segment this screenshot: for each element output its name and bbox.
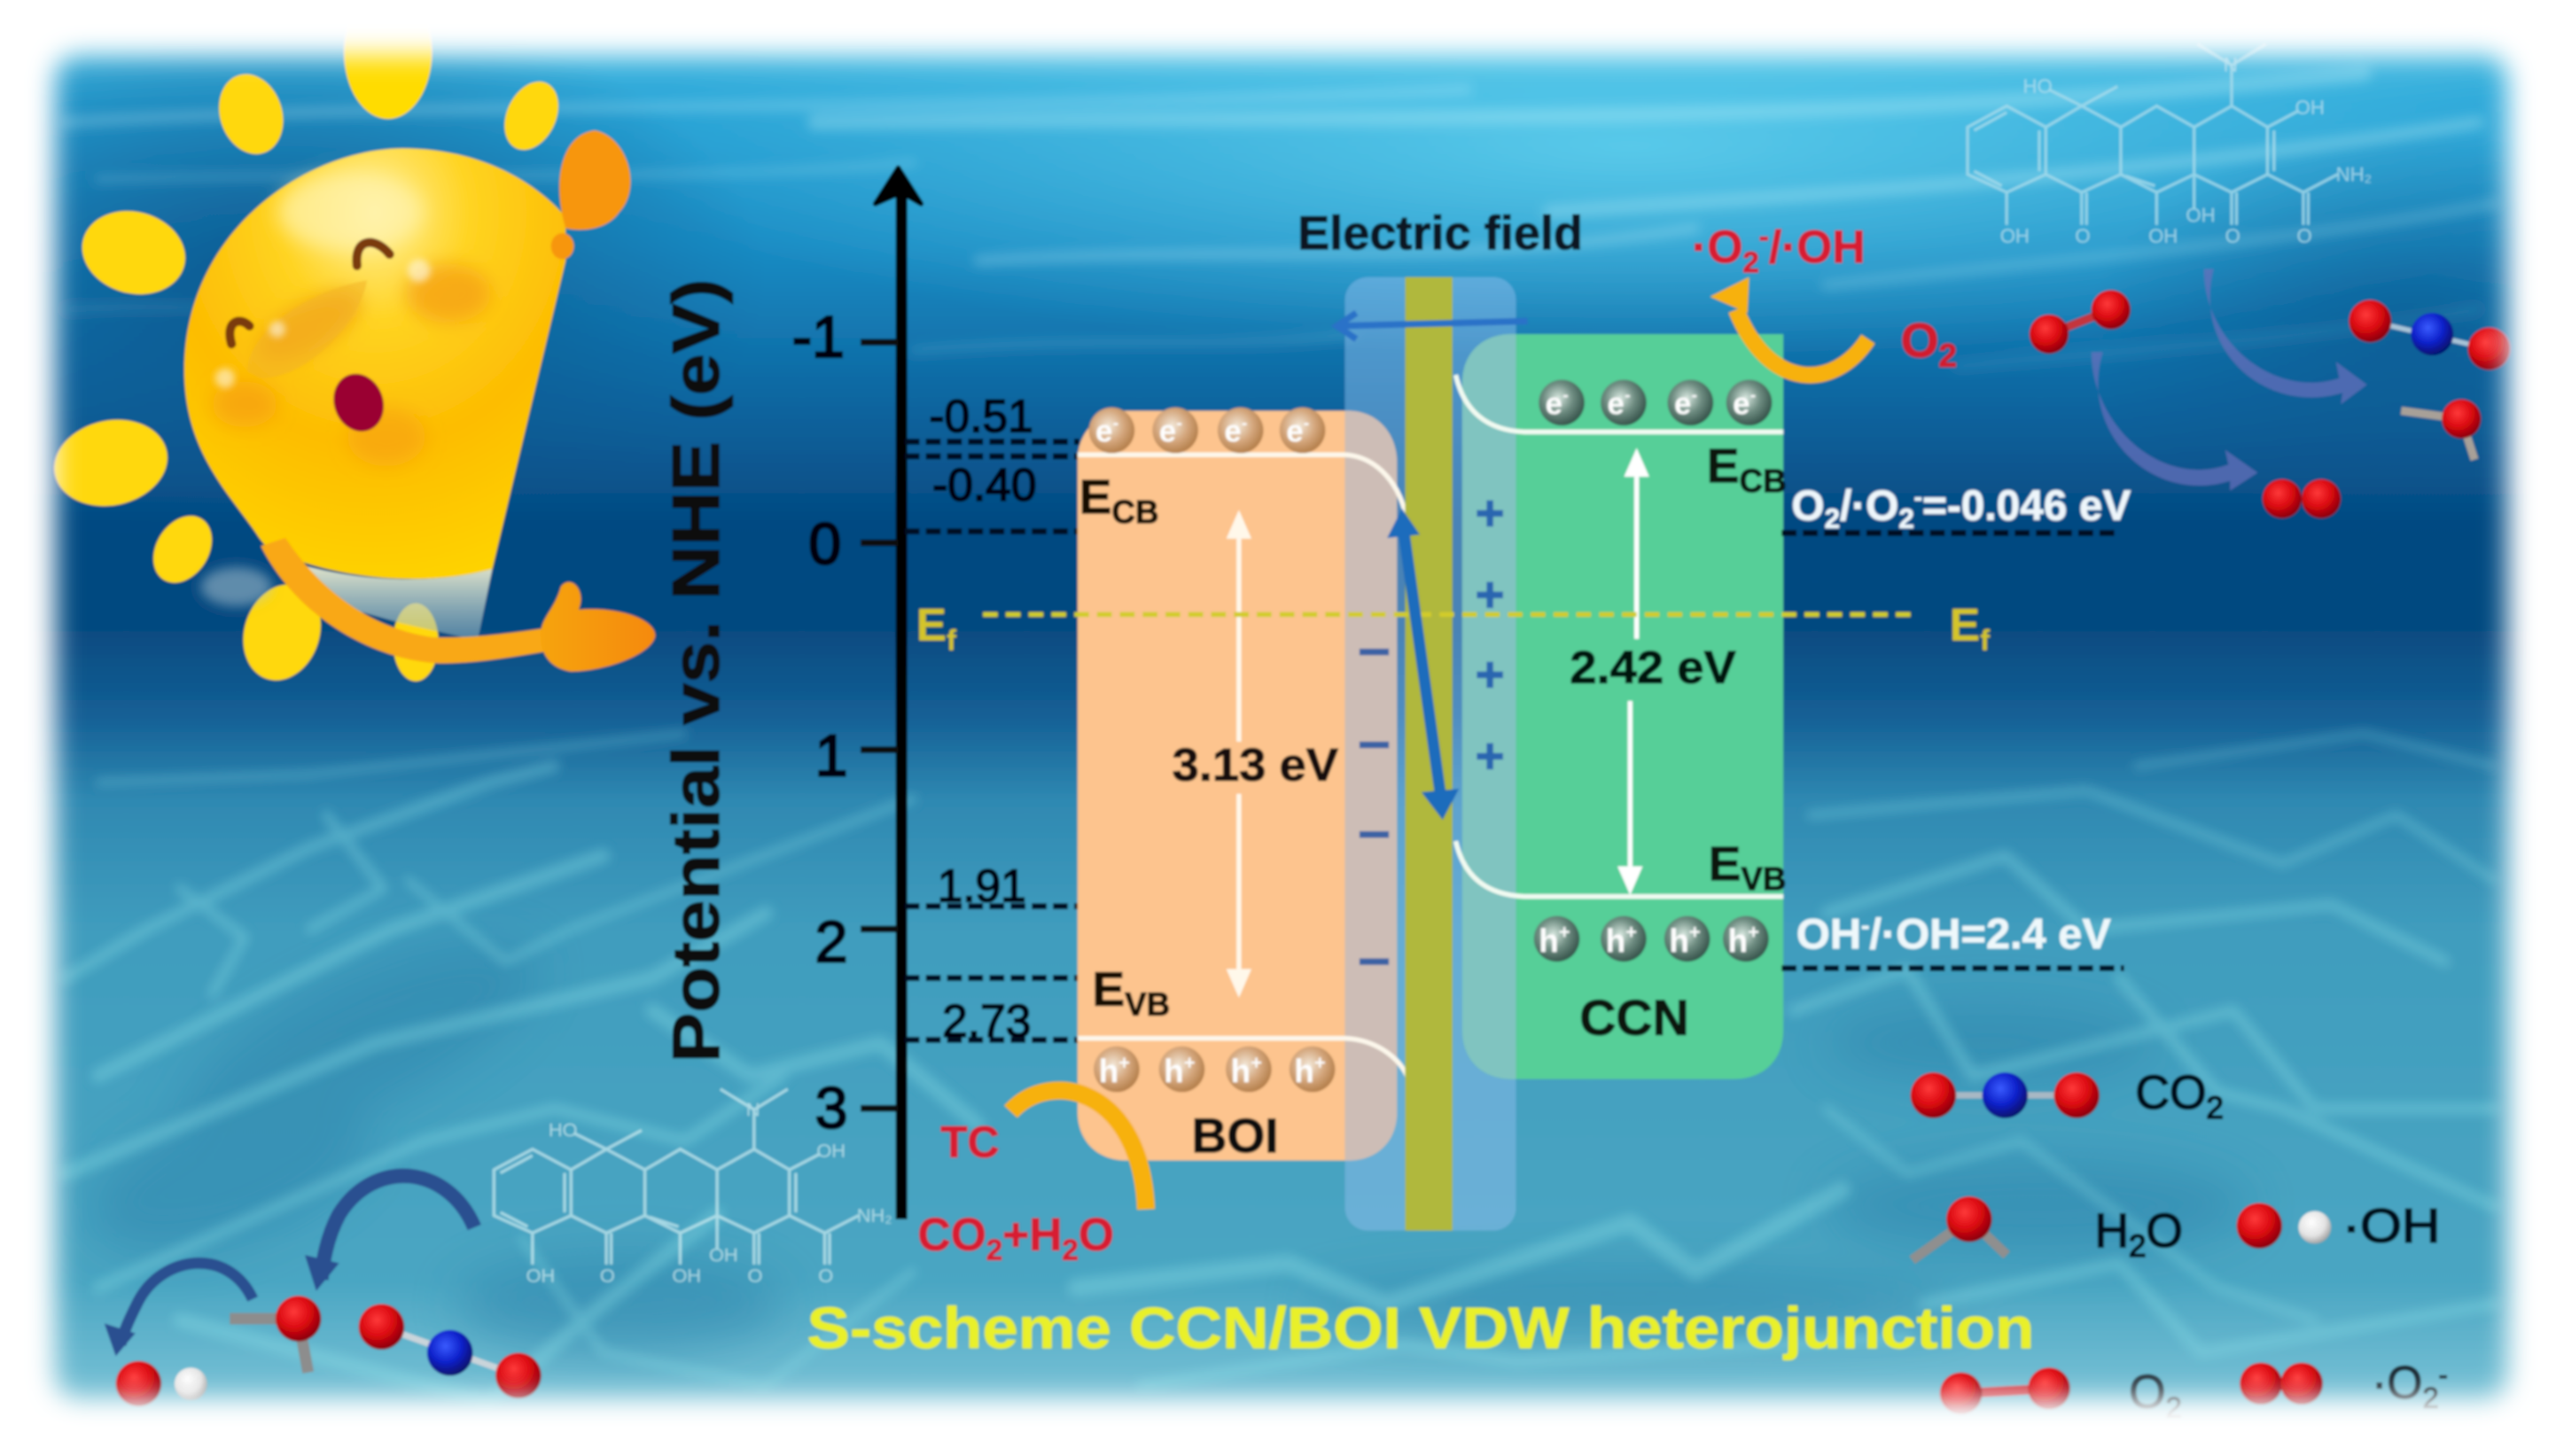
electric field arrow xyxy=(1336,313,1527,339)
Fermi label right: f xyxy=(1980,625,1991,658)
sun raised hand xyxy=(559,130,630,230)
CCN electrons: - xyxy=(1750,385,1756,405)
tetracycline molecule top right: O xyxy=(2225,225,2240,247)
O2 potential label: /·O xyxy=(1840,483,1898,530)
curved arrow small bottom left xyxy=(105,1263,253,1356)
BOI label: BOI xyxy=(1192,1108,1279,1163)
sun smoke xyxy=(200,567,272,606)
Fermi label right: E xyxy=(1950,599,1980,650)
BOI ECB label: CB xyxy=(1111,494,1159,530)
potential values and dashed levels: -0.51 xyxy=(929,390,1033,441)
BOI CB and VB lines xyxy=(1078,455,1412,1089)
CCN holes: h xyxy=(1606,923,1625,959)
axis title: Potential vs. NHE (eV) xyxy=(658,279,733,1063)
BOI electrons: - xyxy=(1304,414,1309,433)
legend: superoxide radical: 2 xyxy=(2422,1382,2439,1415)
potential values and dashed levels xyxy=(905,390,1079,1047)
legend: H2O: 2 xyxy=(2129,1229,2146,1264)
CCN electrons: - xyxy=(1625,385,1631,405)
tetracycline molecule bottom left: NH₂ xyxy=(857,1204,892,1226)
potential values and dashed levels: 1.91 xyxy=(938,860,1026,911)
BOI holes: + xyxy=(1184,1052,1196,1074)
CO2 plus H2O label: 2 xyxy=(986,1234,1002,1267)
O2 potential label: 2 xyxy=(1898,503,1914,534)
BOI EVB label: E xyxy=(1092,962,1125,1016)
panel: BOI band xyxy=(1078,408,1412,1163)
BOI holes: h xyxy=(1231,1053,1251,1089)
purple arrow to O2 radical xyxy=(2092,352,2257,491)
O2 potential label: =-0.046 eV xyxy=(1922,483,2131,530)
CCN EVB label: VB xyxy=(1741,860,1786,897)
BOI electrons xyxy=(1089,408,1325,453)
legend: H2O xyxy=(1912,1196,2183,1264)
OH potential label: OH xyxy=(1796,911,1860,958)
tetracycline molecule bottom left: O xyxy=(748,1265,762,1287)
plus charges xyxy=(1477,501,1503,769)
H2O molecule bottom left xyxy=(230,1296,321,1373)
CCN CB and VB lines xyxy=(1455,375,1783,897)
CO2 plus H2O label: +H xyxy=(1002,1209,1062,1260)
CCN holes: h xyxy=(1728,923,1748,959)
title: S-scheme CCN/BOI VDW heterojunction xyxy=(807,1296,2034,1361)
minus charges xyxy=(1360,649,1389,965)
legend: hydroxyl radical xyxy=(2236,1201,2440,1253)
BOI electrons: e xyxy=(1224,414,1242,448)
axis tick labels: 3 xyxy=(815,1076,847,1141)
tetracycline molecule top right: OH xyxy=(2295,97,2325,119)
CO2 molecule bottom left xyxy=(359,1304,542,1398)
tetracycline molecule bottom left: N xyxy=(746,1098,760,1120)
BOI EVB label: VB xyxy=(1125,986,1170,1023)
BOI ECB label: E xyxy=(1079,469,1111,524)
CCN holes xyxy=(1534,916,1769,962)
legend: superoxide radical: - xyxy=(2439,1361,2448,1390)
sun cheeks xyxy=(215,259,431,388)
tetracycline molecule bottom left: OH xyxy=(526,1265,555,1287)
potential axis with arrow xyxy=(861,167,921,1219)
tetracycline molecule bottom left: OH xyxy=(816,1140,846,1162)
radical products label: /·OH xyxy=(1769,221,1865,272)
tetracycline molecule top right: OH xyxy=(2186,204,2216,226)
BOI electrons: e xyxy=(1286,414,1304,448)
radical products label: 2 xyxy=(1742,246,1759,279)
BOI holes xyxy=(1094,1047,1335,1092)
tetracycline molecule top right: OH xyxy=(2000,225,2030,247)
CCN electrons: e xyxy=(1546,386,1562,421)
CCN electrons: e xyxy=(1674,386,1691,421)
yellow reaction arrow right xyxy=(1710,277,1868,375)
OH potential label: - xyxy=(1861,912,1869,939)
axis tick labels: -1 xyxy=(792,305,845,370)
tetracycline molecule top right: O xyxy=(2075,225,2091,247)
tetracycline molecule bottom left: HO xyxy=(549,1119,577,1141)
CCN EVB label: E xyxy=(1709,836,1741,891)
O2 potential dashed line xyxy=(1781,532,2119,534)
BOI electrons: - xyxy=(1176,414,1182,433)
sun nose xyxy=(247,280,367,378)
tetracycline molecule bottom left: O xyxy=(818,1265,833,1287)
BOI electrons: - xyxy=(1112,414,1118,433)
legend: O2: 2 xyxy=(2166,1392,2182,1425)
CCN band gap: 2.42 eV xyxy=(1570,642,1736,693)
sun character xyxy=(46,0,655,690)
CCN depletion zone xyxy=(1462,334,1516,1079)
CCN electrons xyxy=(1539,380,1772,425)
potential values and dashed levels: 2.73 xyxy=(942,995,1031,1047)
tetracycline molecule bottom left xyxy=(494,1089,892,1287)
legend: CO2: CO xyxy=(2135,1067,2206,1119)
tetracycline molecule top right: OH xyxy=(2148,225,2178,247)
sun eyes xyxy=(230,243,390,344)
CCN electrons: - xyxy=(1562,385,1569,405)
CCN electrons: e xyxy=(1608,386,1625,421)
H2O molecule top right xyxy=(2401,400,2481,460)
CCN ECB label: CB xyxy=(1740,463,1787,499)
CCN holes: + xyxy=(1689,921,1701,943)
sun collar xyxy=(299,564,492,641)
Fermi label left: E xyxy=(916,599,947,650)
BOI holes: h xyxy=(1294,1053,1314,1089)
tetracycline molecule bottom left: O xyxy=(600,1265,615,1287)
S-scheme charge transfer arrow xyxy=(1387,509,1459,820)
radical products label: ·O xyxy=(1692,221,1742,272)
O2 potential label: 2 xyxy=(1825,503,1840,534)
radical products label: - xyxy=(1759,221,1769,253)
BOI holes: + xyxy=(1314,1052,1326,1074)
axis tick labels: 0 xyxy=(808,511,841,577)
CO2 plus H2O label: CO xyxy=(918,1209,986,1260)
CO2 plus H2O label: O xyxy=(1079,1209,1114,1260)
CCN gap arrows xyxy=(1618,450,1648,893)
legend: hydroxyl radical: ·OH xyxy=(2342,1201,2440,1253)
yellow reaction arrow left xyxy=(1010,1091,1146,1210)
legend: H2O: H xyxy=(2094,1205,2129,1257)
tetracycline molecule top right: O xyxy=(2297,225,2312,247)
CO2 molecule top right xyxy=(2349,300,2510,370)
BOI holes: h xyxy=(1099,1053,1118,1089)
CCN holes: + xyxy=(1625,921,1637,943)
BOI holes: + xyxy=(1251,1052,1262,1074)
tetracycline molecule top right: HO xyxy=(2023,75,2053,97)
CCN holes: + xyxy=(1748,921,1759,943)
sun rays around xyxy=(46,66,569,690)
CCN label: CCN xyxy=(1579,990,1689,1047)
CO2 plus H2O label: 2 xyxy=(1062,1234,1079,1267)
TC label: TC xyxy=(940,1117,999,1167)
BOI electrons: e xyxy=(1095,414,1112,448)
O2 potential label: O xyxy=(1791,483,1825,530)
BOI gap arrows xyxy=(1227,512,1251,996)
purple arrow to CO2 xyxy=(2204,269,2367,404)
tetracycline molecule bottom left: OH xyxy=(709,1244,738,1265)
potential values and dashed levels: -0.40 xyxy=(932,459,1036,510)
sun head xyxy=(184,148,565,579)
CCN holes: h xyxy=(1539,923,1559,959)
O2 molecule top right xyxy=(2030,290,2131,354)
sun ray top xyxy=(342,34,434,121)
legend: CO2 xyxy=(1911,1067,2224,1125)
legend: H2O: O xyxy=(2146,1205,2183,1257)
legend: superoxide radical: ·O xyxy=(2372,1357,2422,1408)
BOI holes: + xyxy=(1118,1052,1130,1074)
BOI depletion zone xyxy=(1344,410,1397,1161)
tetracycline molecule top right: NH₂ xyxy=(2336,163,2372,185)
CCN holes: h xyxy=(1669,923,1689,959)
CCN electrons: - xyxy=(1691,385,1697,405)
panel: CCN band xyxy=(1455,334,1787,1079)
legend: CO2: 2 xyxy=(2206,1091,2224,1125)
field region band xyxy=(1344,277,1516,1231)
curved arrow large bottom left xyxy=(305,1176,474,1291)
O2 reactant label: O xyxy=(1901,313,1938,368)
legend: O2 xyxy=(1940,1366,2182,1425)
OH potential label: /·OH=2.4 eV xyxy=(1869,911,2111,958)
electric field label: Electric field xyxy=(1297,207,1583,260)
O2 potential label: - xyxy=(1914,483,1922,510)
O2 reactant label: 2 xyxy=(1938,338,1957,374)
tetracycline molecule top right: N xyxy=(2224,54,2238,76)
axis tick labels: 2 xyxy=(815,909,847,975)
CCN electrons: e xyxy=(1733,386,1750,421)
tetracycline molecule top right xyxy=(1968,44,2372,247)
olive interface layer xyxy=(1405,277,1453,1231)
sun mouth xyxy=(325,367,392,439)
BOI band gap: 3.13 eV xyxy=(1172,739,1338,790)
BOI holes: h xyxy=(1164,1053,1184,1089)
legend: O2: O xyxy=(2129,1366,2166,1419)
face shading xyxy=(212,173,491,466)
OH molecule bottom left xyxy=(116,1361,207,1406)
OH potential dashed line xyxy=(1781,967,2124,969)
tetracycline molecule bottom left: OH xyxy=(672,1265,701,1287)
Fermi level dashed line xyxy=(983,613,1915,616)
BOI electrons: e xyxy=(1159,414,1176,448)
axis tick labels xyxy=(792,305,847,1141)
O2 radical molecule top right xyxy=(2263,479,2341,518)
Fermi label left: f xyxy=(947,625,957,658)
sun arm and hand xyxy=(261,538,563,664)
CCN ECB label: E xyxy=(1707,438,1740,493)
legend: superoxide radical xyxy=(2240,1357,2448,1415)
BOI electrons: - xyxy=(1242,414,1247,433)
CCN holes: + xyxy=(1559,921,1570,943)
axis tick labels: 1 xyxy=(815,723,847,789)
